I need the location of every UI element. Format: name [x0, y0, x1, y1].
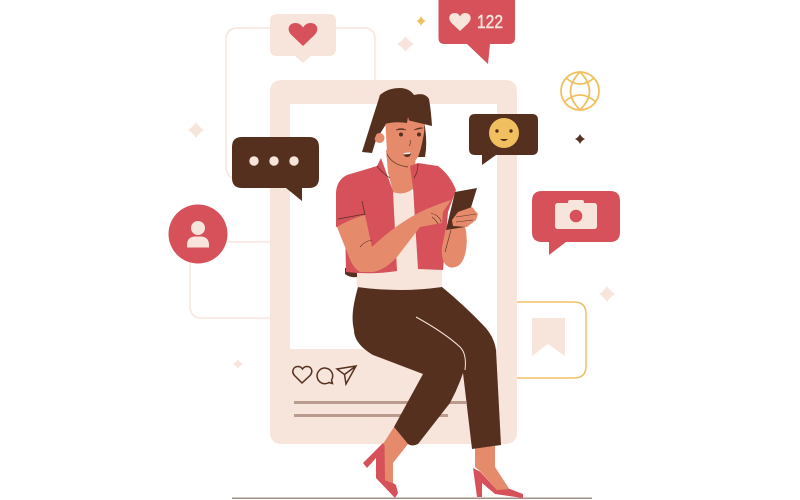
far arm [442, 222, 467, 268]
hair top [372, 88, 432, 140]
hand [452, 207, 478, 227]
ear [374, 133, 384, 143]
user avatar [168, 204, 228, 264]
phone frame [270, 80, 517, 444]
jacket right [410, 163, 456, 270]
ground line [232, 498, 592, 499]
face [385, 115, 424, 167]
right shoe [473, 468, 523, 498]
jacket details [338, 164, 418, 219]
left leg skin [380, 427, 408, 483]
like count bubble [438, 0, 515, 64]
chat bubble with dots [232, 137, 319, 201]
connector line: avatar to phone [190, 242, 270, 318]
near arm [337, 200, 451, 272]
back of hair [362, 95, 426, 157]
camera bubble [532, 191, 620, 255]
sparkles [188, 16, 615, 369]
shirt [356, 190, 442, 290]
connector line: top loop [226, 28, 375, 179]
jaw line [387, 154, 408, 167]
neck [386, 150, 416, 193]
like count bubble: 122 [477, 12, 503, 32]
post action icons [293, 366, 356, 384]
trousers [353, 287, 501, 449]
jacket back fold [345, 268, 357, 277]
heart bubble [270, 14, 336, 63]
eyes and brows [396, 128, 423, 146]
left shoe [363, 443, 398, 498]
emoji bubble [469, 114, 538, 165]
icon: globe [561, 72, 599, 110]
trouser seam [416, 317, 465, 370]
woman [336, 88, 523, 498]
caption lines [294, 401, 466, 417]
right leg skin [475, 446, 510, 490]
bookmark card [517, 302, 586, 378]
phone [446, 188, 477, 230]
mouth [403, 152, 411, 157]
jacket left [336, 158, 397, 273]
